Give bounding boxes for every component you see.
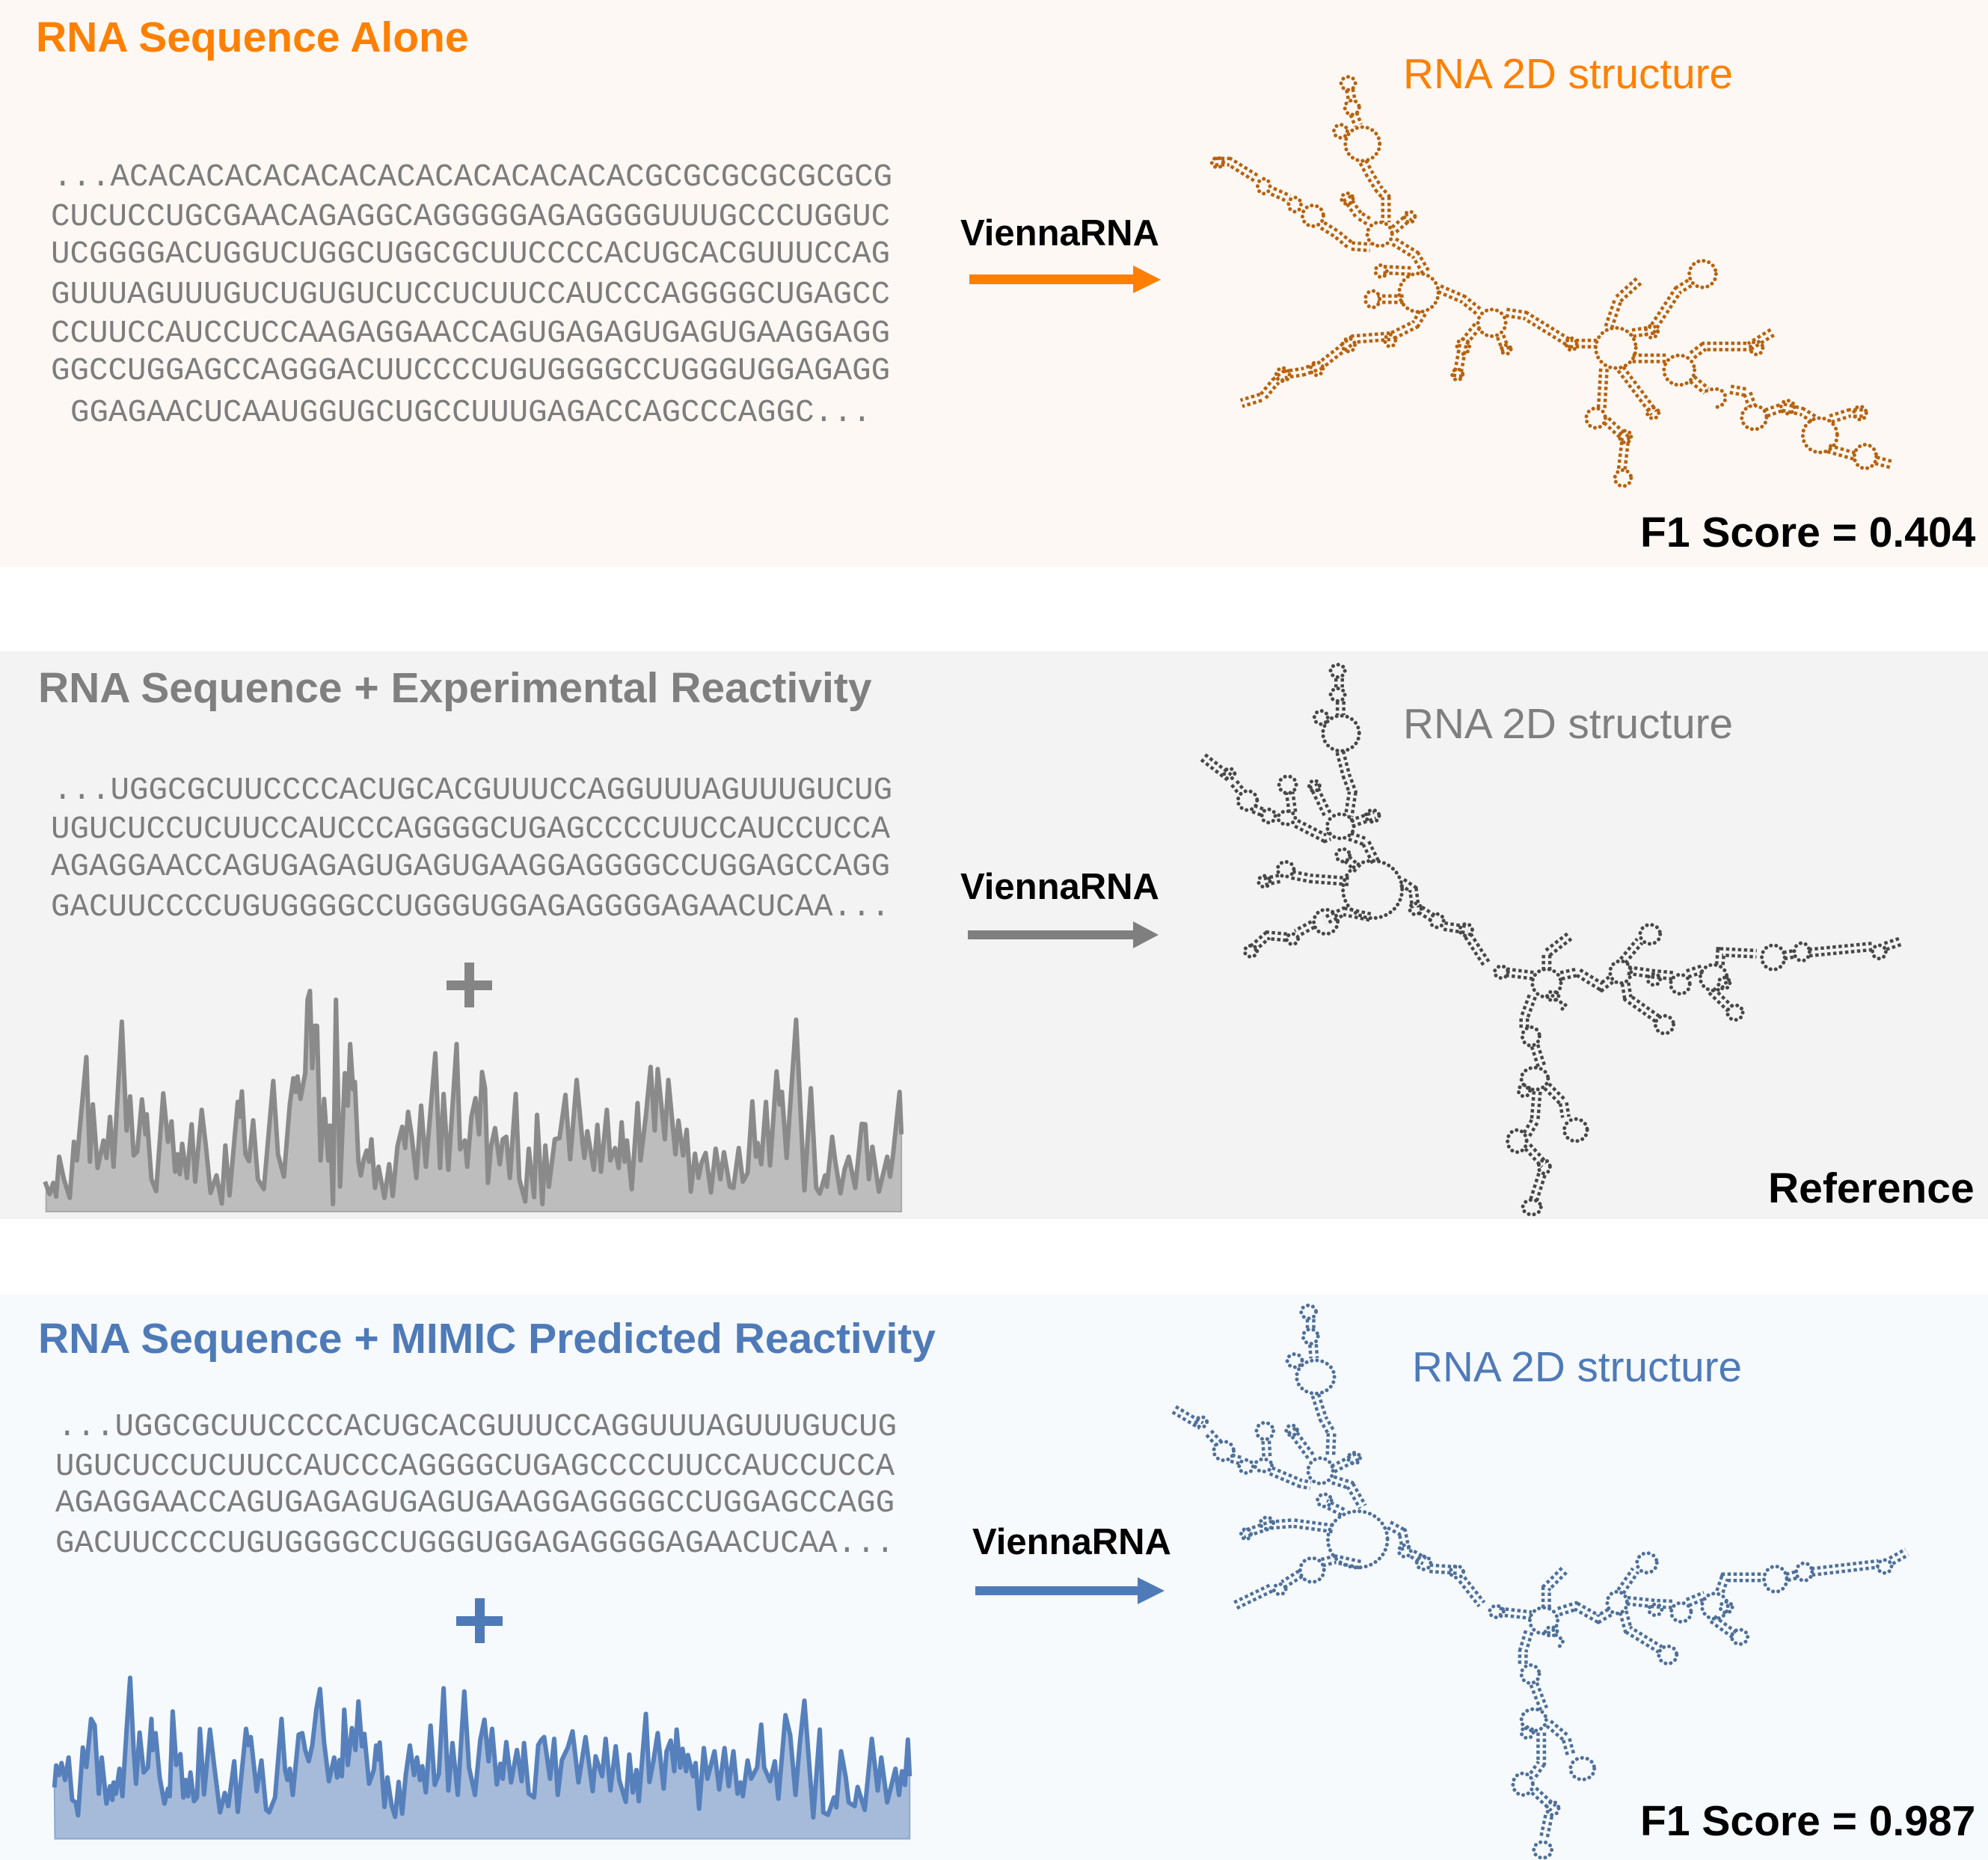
text block: RNA sequence: UCGGGGACUGGUCUGGCUGGCGCUUCCCCACUGCACGUUUCCAG — [51, 236, 890, 272]
text block: RNA sequence: AGAGGAACCAGUGAGAGUGAGUGAAGGAGGGGCCUGGAGCCAGG — [51, 849, 890, 885]
RNA 2D structure diagram — [1212, 77, 1892, 486]
text block: RNA sequence — [51, 773, 892, 925]
arrow — [975, 1577, 1165, 1604]
text block: RNA sequence: GGAGAACUCAAUGGUGCUGCCUUUGAGACCAGCCCAGGC... — [70, 395, 871, 431]
text block: RNA sequence: GUUUAGUUUGUCUGUGUCUCCUCUUCCAUCCCAGGGGCUGAGCC — [51, 277, 890, 313]
panel: RNA sequence alone — [0, 0, 1988, 567]
text block: RNA sequence — [51, 159, 892, 431]
label: ViennaRNA: ViennaRNA — [960, 867, 1159, 907]
icon: plus — [447, 963, 492, 1007]
RNA 2D structure diagram — [1174, 1305, 1907, 1858]
chart: MIMIC predicted reactivity — [55, 1678, 909, 1839]
heading: RNA Sequence + MIMIC Predicted Reactivity: RNA Sequence + MIMIC Predicted Reactivity — [38, 1315, 936, 1363]
label: RNA 2D structure: RNA 2D structure — [1412, 1344, 1742, 1391]
panel: RNA sequence plus experimental reactivity — [0, 651, 1988, 1219]
text block: RNA sequence: ...ACACACACACACACACACACACACACACGCGCGCGCGCGCG — [53, 159, 892, 195]
score: F1 0.987: F1 Score = 0.987 — [1640, 1797, 1975, 1845]
label: ViennaRNA: ViennaRNA — [972, 1522, 1171, 1562]
arrow — [969, 266, 1161, 293]
arrow — [968, 921, 1159, 948]
heading: RNA Sequence + Experimental Reactivity: RNA Sequence + Experimental Reactivity — [38, 664, 872, 712]
label: RNA 2D structure: RNA 2D structure — [1403, 701, 1733, 748]
chart: experimental reactivity — [45, 991, 901, 1212]
RNA 2D structure diagram — [1203, 665, 1902, 1215]
text block: RNA sequence: UGUCUCCUCUUCCAUCCCAGGGGCUGAGCCCCUUCCAUCCUCCA — [51, 811, 891, 847]
text block: RNA sequence: AGAGGAACCAGUGAGAGUGAGUGAAGGAGGGGCCUGGAGCCAGG — [55, 1485, 895, 1521]
text block: RNA sequence: GGCCUGGAGCCAGGGACUUCCCCUGUGGGGCCUGGGUGGAGAGG — [51, 353, 890, 389]
text block: RNA sequence: UGUCUCCUCUUCCAUCCCAGGGGCUGAGCCCCUUCCAUCCUCCA — [55, 1449, 895, 1485]
panel: RNA sequence plus MIMIC predicted reactivity — [0, 1295, 1988, 1860]
text block: RNA sequence — [55, 1409, 897, 1562]
label: Reference: Reference — [1768, 1164, 1975, 1212]
score: F1 0.404: F1 Score = 0.404 — [1640, 509, 1976, 556]
text block: RNA sequence: ...UGGCGCUUCCCCACUGCACGUUUCCAGGUUUAGUUUGUCUG — [53, 773, 892, 808]
text block: RNA sequence: CUCUCCUGCGAACAGAGGCAGGGGGAGAGGGGUUUGCCCUGGUC — [51, 199, 890, 235]
text block: RNA sequence: GACUUCCCCUGUGGGGCCUGGGUGGAGAGGGGAGAACUCAA... — [51, 889, 890, 925]
heading: RNA Sequence Alone: RNA Sequence Alone — [36, 13, 469, 61]
label: ViennaRNA: ViennaRNA — [960, 213, 1159, 254]
label: RNA 2D structure: RNA 2D structure — [1403, 51, 1733, 98]
icon: plus — [456, 1598, 503, 1643]
text block: RNA sequence: ...UGGCGCUUCCCCACUGCACGUUUCCAGGUUUAGUUUGUCUG — [58, 1409, 897, 1445]
text block: RNA sequence: CCUUCCAUCCUCCAAGAGGAACCAGUGAGAGUGAGUGAAGGAGG — [51, 316, 890, 352]
text block: RNA sequence: GACUUCCCCUGUGGGGCCUGGGUGGAGAGGGGAGAACUCAA... — [55, 1526, 895, 1562]
